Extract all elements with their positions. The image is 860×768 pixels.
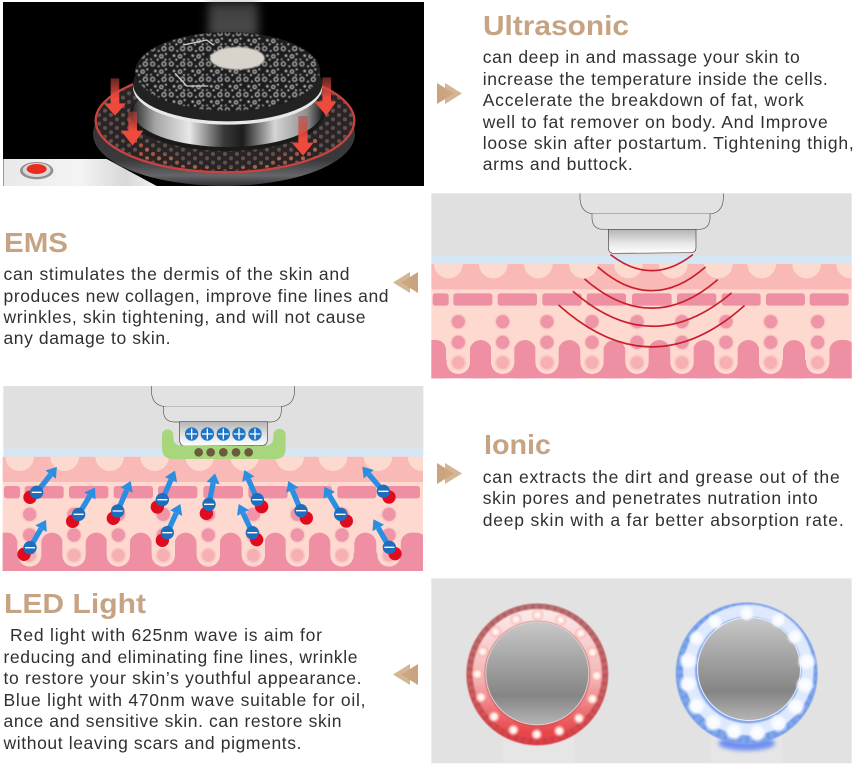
ionic handle [151, 386, 295, 446]
mist plume [208, 2, 258, 37]
text block: ultrasonic description: loose skin after postartum. Tightening thigh, [483, 133, 854, 153]
white device body with button [3, 159, 157, 186]
heading: Ionic: Ionic [484, 429, 551, 460]
text block: LED description: without leaving scars and pigments. [2, 733, 302, 753]
round device head [93, 32, 355, 186]
text block: LED description: to restore your skin’s youthful appearance. [4, 668, 361, 688]
text block: ionic description: can extracts the dirt and grease out of the [483, 467, 840, 487]
text block: ultrasonic description: Accelerate the breakdown of fat, work [483, 90, 804, 110]
text block: ultrasonic description: well to fat remover on body. And Improve [482, 112, 828, 132]
brown dirt particles [194, 448, 253, 457]
red particles [17, 490, 402, 561]
text block: ionic description [483, 467, 844, 530]
text block: ultrasonic description: arms and buttock. [483, 154, 633, 174]
panel: ultrasound skin diagram [423, 193, 860, 383]
text block: ionic description: skin pores and penetrates nutration into [483, 488, 818, 508]
red LED head [466, 603, 608, 763]
ultrasonic wave arcs [559, 255, 744, 347]
heading: EMS: EMS [4, 227, 68, 258]
icon: right chevrons [437, 463, 462, 484]
text block: ultrasonic description: can deep in and massage your skin to [483, 47, 800, 67]
text block: EMS description: can stimulates the dermis of the skin and [4, 264, 350, 284]
text block: LED description: ance and sensitive skin. can restore skin [4, 711, 342, 731]
negative ions [23, 485, 396, 554]
heading: LED Light: LED Light [4, 588, 146, 619]
text block: ultrasonic description [482, 47, 854, 174]
text block: ultrasonic description: increase the temperature inside the cells. [483, 69, 828, 89]
panel: LED light photo [431, 578, 852, 763]
text block: EMS description: produces new collagen, improve fine lines and [4, 286, 388, 306]
panel: ionic skin diagram [0, 386, 436, 576]
text block: LED description [2, 625, 366, 753]
text block: LED description: Red light with 625nm wave is aim for [10, 625, 322, 645]
text block: EMS description: any damage to skin. [4, 328, 170, 348]
icon: red downward arrows [104, 77, 336, 156]
panel: ultrasonic device photo [3, 2, 424, 186]
ultrasonic handle [580, 193, 723, 253]
positive ions [185, 427, 262, 441]
text block: ionic description: deep skin with a far better absorption rate. [483, 510, 844, 530]
blue arrows [30, 474, 389, 548]
text block: LED description: reducing and eliminating fine lines, wrinkle [4, 647, 358, 667]
text block: EMS description: wrinkles, skin tightening, and will not cause [2, 307, 366, 327]
icon: left chevrons [393, 272, 418, 293]
text block: LED description: Blue light with 470nm wave suitable for oil, [4, 690, 366, 710]
icon: right chevrons [437, 83, 462, 104]
green electrode cradle [162, 429, 286, 459]
blue LED head [676, 602, 818, 763]
heading: Ultrasonic: Ultrasonic [483, 10, 629, 41]
icon: left chevrons [393, 664, 418, 685]
text block: EMS description [2, 264, 388, 348]
